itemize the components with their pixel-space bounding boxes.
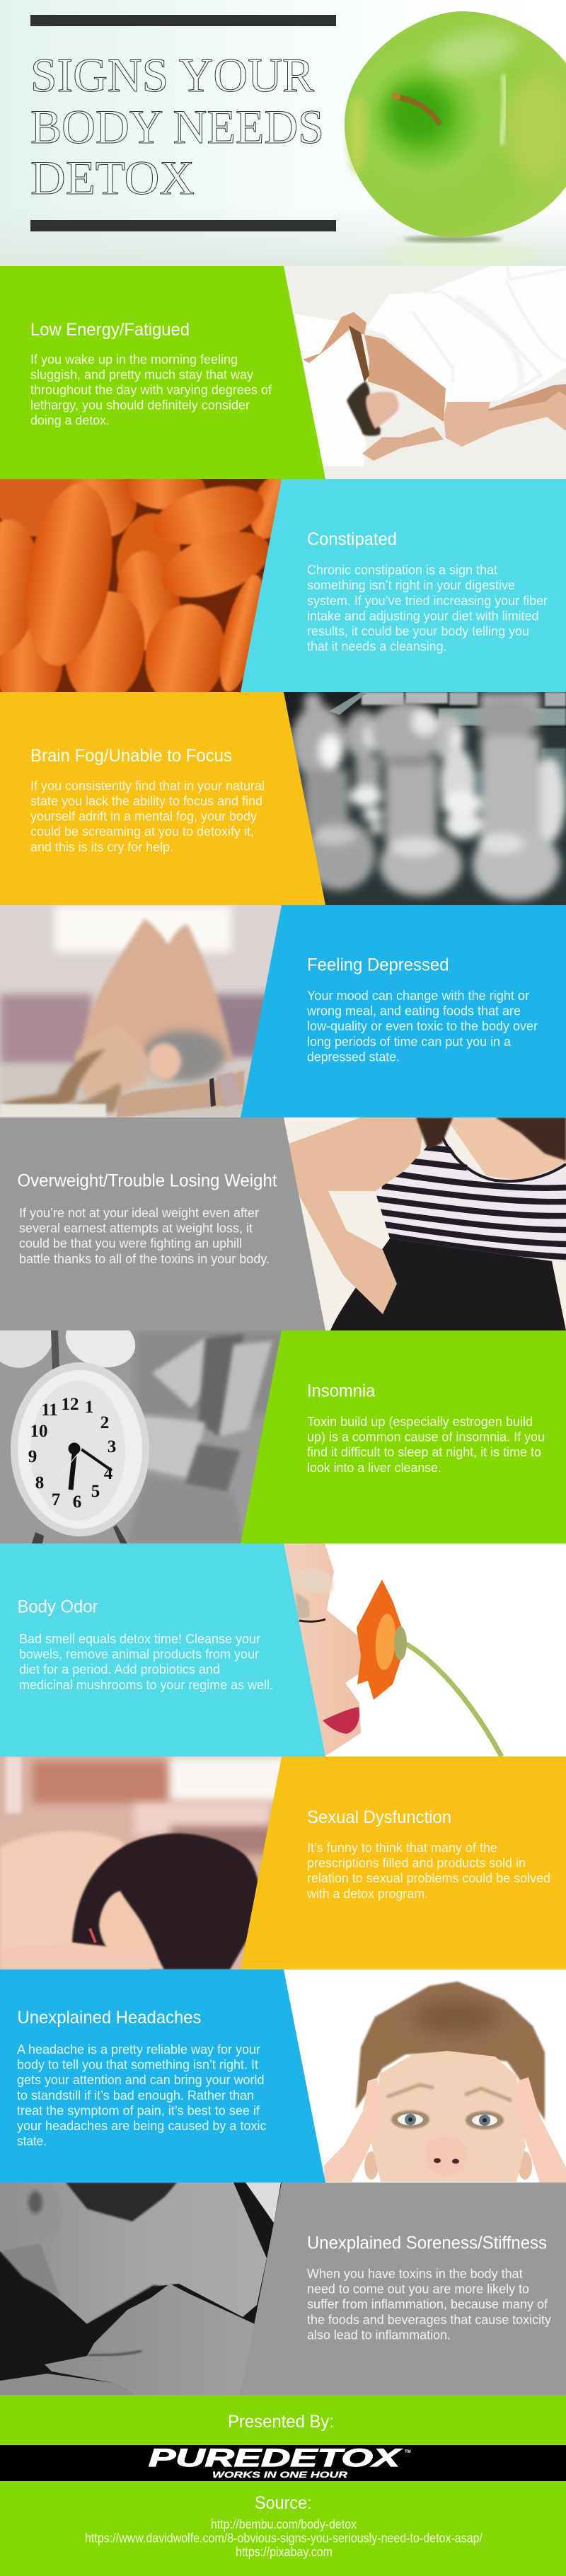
photo: woman in striped top	[269, 1117, 566, 1330]
body text: wrong meal, and eating foods that are	[306, 1004, 521, 1018]
presented by heading: Presented By:	[228, 2412, 334, 2432]
heading: Constipated	[307, 529, 397, 549]
body text: bowels, remove animal products from your	[19, 1648, 259, 1662]
body text	[307, 563, 548, 654]
flower	[357, 1580, 407, 1700]
clock numerals: 11	[41, 1401, 58, 1420]
clock numerals: 2	[100, 1413, 109, 1432]
body text: relation to sexual problems could be solved	[307, 1871, 550, 1885]
body text	[307, 1415, 545, 1475]
body text: need to come out you are more likely to	[307, 2282, 529, 2296]
clock hands	[55, 1443, 112, 1490]
source links	[85, 2517, 483, 2559]
clock numerals: 9	[28, 1447, 37, 1466]
title	[31, 59, 321, 195]
body text: that it needs a cleansing.	[307, 640, 447, 654]
body text: intake and adjusting your diet with limited	[307, 609, 539, 623]
hero header	[0, 0, 566, 269]
photo: woman with headache	[324, 1980, 566, 2183]
source heading: Source:	[255, 2493, 312, 2513]
body text: Your mood can change with the right or	[307, 989, 529, 1003]
body text: A headache is a pretty reliable way for your	[17, 2042, 260, 2057]
body text	[30, 352, 272, 427]
body text: body to tell you that something isn’t right. It	[17, 2058, 258, 2072]
panel: overweight	[0, 1117, 325, 1330]
body text	[19, 1206, 270, 1266]
title: BODY NEEDS	[30, 100, 324, 154]
body text: could be that you were fighting an uphill	[19, 1236, 242, 1250]
body text	[30, 778, 265, 854]
clock numerals: 12	[61, 1395, 79, 1414]
heading: Overweight/Trouble Losing Weight	[17, 1171, 277, 1191]
source links: http://bembu.com/body-detox	[211, 2517, 357, 2531]
chess piece shapes	[291, 692, 565, 900]
panel: feeling depressed	[241, 905, 566, 1117]
panel: insomnia	[241, 1330, 566, 1543]
logo band	[0, 2444, 566, 2481]
panel: constipated	[241, 479, 566, 692]
body text: find it difficult to sleep at night, it is time to	[307, 1445, 541, 1459]
body text: battle thanks to all of the toxins in your body.	[19, 1252, 270, 1266]
body text: the foods and beverages that cause toxicity	[307, 2313, 551, 2327]
photo: woman under white duvet	[269, 266, 566, 479]
panel: sexual dysfunction	[241, 1756, 566, 1970]
body text: state you lack the ability to focus and find	[30, 794, 262, 808]
heading: Unexplained Soreness/Stiffness	[307, 2233, 547, 2253]
clock numerals	[28, 1395, 116, 1512]
logo band: TM	[405, 2450, 411, 2454]
heading: Feeling Depressed	[307, 955, 449, 975]
icon: green apple	[345, 11, 566, 269]
body text: also lead to inflammation.	[307, 2328, 451, 2342]
source links: https://pixabay.com	[236, 2545, 333, 2559]
panel: brain fog	[0, 692, 325, 905]
heading: Sexual Dysfunction	[307, 1807, 451, 1827]
body text	[17, 2042, 266, 2149]
panel: low energy	[0, 266, 325, 479]
photo: hand on sore neck	[0, 2183, 297, 2395]
clock numerals: 8	[35, 1473, 44, 1493]
body text: diet for a period. Add probiotics and	[19, 1662, 220, 1677]
body text: lethargy, you should definitely consider	[30, 398, 250, 412]
body text: If you wake up in the morning feeling	[30, 352, 238, 367]
photo: blurred chess pieces	[269, 692, 566, 905]
body text: suffer from inflammation, because many of	[307, 2297, 548, 2311]
body text: If you’re not at your ideal weight even after	[19, 1206, 259, 1220]
photo: alarm clock	[0, 1330, 282, 1543]
clock numerals: 5	[91, 1482, 100, 1501]
body text: and this is its cry for help.	[30, 840, 173, 854]
body text: When you have toxins in the body that	[307, 2267, 523, 2281]
body text: something isn’t right in your digestive	[307, 578, 515, 592]
body text: sluggish, and pretty much stay that way	[30, 368, 253, 382]
clock numerals: 10	[30, 1422, 48, 1441]
body text: gets your attention and can bring your world	[17, 2073, 265, 2087]
photo: woman lying on bed	[0, 905, 297, 1118]
photo: sleeping woman	[0, 1756, 297, 1970]
body text: state.	[17, 2134, 47, 2149]
body text	[306, 989, 538, 1064]
body text	[306, 1841, 550, 1901]
body text: doing a detox.	[30, 413, 110, 427]
photo: carrots	[0, 479, 282, 692]
clock numerals: 4	[104, 1464, 113, 1483]
footer	[0, 2395, 566, 2576]
body text: Chronic constipation is a sign that	[307, 563, 497, 577]
title: SIGNS YOUR	[30, 48, 315, 102]
body text: low-quality or even toxic to the body over	[307, 1019, 538, 1033]
body text: system. If you’ve tried increasing your fiber	[307, 594, 548, 608]
body text: throughout the day with varying degrees of	[30, 383, 272, 397]
source links: https://www.davidwolfe.com/8-obvious-signs-you-seriously-need-to-detox-asap/	[85, 2531, 483, 2545]
body text: Toxin build up (especially estrogen build	[307, 1415, 533, 1429]
heading: Unexplained Headaches	[17, 2008, 201, 2028]
clock numerals: 7	[52, 1490, 60, 1510]
heading: Insomnia	[307, 1381, 375, 1401]
bottom bar	[30, 220, 336, 231]
title: DETOX	[30, 151, 195, 205]
clock numerals: 3	[108, 1437, 116, 1456]
body text: results, it could be your body telling you	[307, 624, 529, 638]
hands	[324, 2077, 566, 2183]
clock numerals: 6	[73, 1493, 81, 1512]
logo band: WORKS IN ONE HOUR	[212, 2471, 348, 2480]
body text: depressed state.	[307, 1050, 400, 1064]
body text	[307, 2267, 551, 2342]
body text: your headaches are being caused by a toxic	[17, 2119, 266, 2133]
body text: prescriptions filled and products sold in	[307, 1856, 526, 1870]
body text: treat the symptom of pain, it’s best to see if	[17, 2103, 260, 2117]
clock numerals: 1	[85, 1398, 93, 1417]
heading: Low Energy/Fatigued	[30, 320, 190, 340]
body text: could be screaming at you to detoxify it,	[30, 824, 254, 839]
body text: look into a liver cleanse.	[307, 1461, 441, 1475]
body text: up) is a common cause of insomnia. If you	[307, 1430, 545, 1444]
body text: yourself adrift in a mental fog, your body	[30, 810, 257, 824]
body text: It’s funny to think that many of the	[307, 1841, 497, 1855]
photo: woman smelling flower	[284, 1543, 504, 1756]
body text: to standstill if it’s bad enough. Rather than	[17, 2088, 254, 2103]
panel: unexplained headaches	[0, 1970, 325, 2183]
heading: Body Odor	[17, 1597, 98, 1617]
body text: Bad smell equals detox time! Cleanse your	[19, 1632, 260, 1646]
panel: body odor	[0, 1543, 325, 1756]
panel: soreness	[241, 2183, 566, 2395]
logo band: PUREDETOX	[149, 2444, 403, 2472]
body text	[19, 1632, 273, 1692]
body text: If you consistently find that in your natural	[30, 778, 265, 793]
body text: medicinal mushrooms to your regime as well.	[19, 1678, 273, 1692]
heading: Brain Fog/Unable to Focus	[30, 746, 232, 766]
body text: with a detox program.	[306, 1887, 428, 1901]
body text: several earnest attempts at weight loss, it	[19, 1221, 253, 1236]
top bar	[30, 15, 336, 26]
body text: long periods of time can put you in a	[307, 1035, 512, 1049]
